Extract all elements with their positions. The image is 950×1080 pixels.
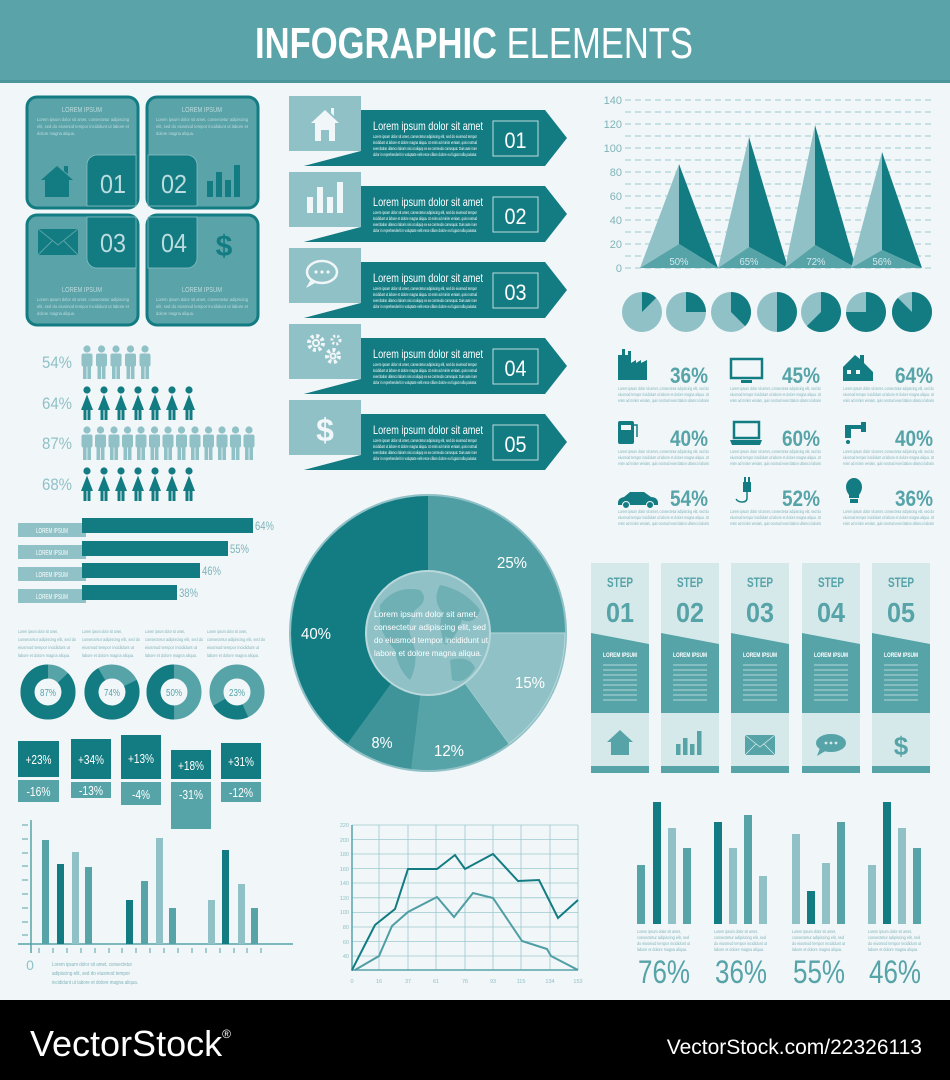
- row 54%: [42, 345, 150, 379]
- stat laptop 60%: [730, 422, 820, 451]
- ribbon 04: incididunt ut labore et dolore magna aliqua. Ut enim ad minim veniam, quis nostrud: [373, 368, 477, 373]
- tile 02: Lorem ipsum dolor sit amet, consectetur adipiscing: [156, 117, 249, 122]
- box +31/-12: +31%: [228, 754, 254, 769]
- panel: icon stats grid: enim ad minim veniam, quis nostrud exercitation ullamco laboris: [730, 398, 822, 403]
- tile 04: dolore magna aliqua.: [156, 311, 194, 316]
- step 04: 04: [817, 597, 845, 628]
- text blocks above donuts: consectetur adipiscing elit, sed do: [145, 637, 203, 642]
- step 05: STEP: [888, 574, 914, 590]
- ribbon 03: [289, 248, 567, 318]
- chart: central donut with globe: 15%: [515, 675, 545, 692]
- tile 04: 04: [161, 228, 187, 258]
- group 55%: Lorem ipsum dolor sit amet,: [792, 929, 836, 934]
- group 55%: consectetur adipiscing elit, sed: [792, 935, 844, 940]
- panel: horizontal bar chart: [18, 518, 274, 603]
- group 76%: [637, 802, 691, 990]
- donut 87%: [28, 672, 68, 712]
- ribbon 02: dolor in reprehenderit in voluptate velit esse cillum dolore eu fugiat nulla pariatur.: [373, 228, 477, 233]
- panel: small donuts: [28, 664, 265, 720]
- pyramid 50%: 50%: [670, 257, 689, 268]
- step 05: LOREM IPSUM: [884, 652, 918, 659]
- step 01: [591, 563, 649, 773]
- bar 46%: [18, 563, 221, 581]
- chart: line chart: 16: [376, 979, 382, 985]
- pyramid 65%: 65%: [740, 257, 759, 268]
- tile 03: dolore magna aliqua.: [37, 311, 75, 316]
- panel: people rows: [42, 345, 254, 501]
- step 04: STEP: [818, 574, 844, 590]
- panel: icon stats grid: Lorem ipsum dolor sit amet, consectetur adipiscing elit, sed do: [730, 386, 821, 391]
- chart: pyramid chart: [604, 95, 935, 275]
- donut 50%: 50%: [166, 688, 182, 699]
- panel: grouped bar charts with percentages: [637, 802, 922, 990]
- text blocks above donuts: labore et dolore magna aliqua.: [82, 653, 134, 658]
- donut 74%: 74%: [104, 688, 120, 699]
- stat car 54%: 54%: [670, 486, 708, 511]
- ribbon 04: [289, 324, 567, 394]
- donut 74%: [84, 664, 140, 720]
- ribbon 01: Lorem ipsum dolor sit amet: [373, 119, 483, 133]
- chart: central donut with globe: consectetur adipiscing elit, sed: [374, 622, 486, 632]
- panel: icon stats grid: enim ad minim veniam, quis nostrud exercitation ullamco laboris: [618, 461, 710, 466]
- stat car 54%: [618, 486, 708, 511]
- row 87%: 87%: [42, 434, 72, 453]
- chart: line chart: 76: [462, 979, 468, 985]
- panel: arrow ribbons: [289, 96, 567, 470]
- panel: icon stats grid: eiusmod tempor incididunt ut labore et dolore magna aliqua. Ut: [618, 392, 710, 397]
- group 46%: consectetur adipiscing elit, sed: [868, 935, 920, 940]
- step 03: 03: [746, 597, 774, 628]
- stat bulb 36%: 36%: [895, 486, 933, 511]
- tile 02: [147, 97, 258, 208]
- row 54%: 54%: [42, 353, 72, 372]
- bar 64%: LOREM IPSUM: [36, 528, 68, 535]
- stat monitor 45%: 45%: [782, 363, 820, 388]
- chart: line chart: 200: [340, 838, 349, 844]
- group 76%: Lorem ipsum dolor sit amet,: [637, 929, 681, 934]
- chart: central donut with globe: 8%: [372, 735, 392, 752]
- ribbon 02: Lorem ipsum dolor sit amet: [373, 195, 483, 209]
- bar chart: bottom left: [18, 820, 293, 986]
- chart: line chart: 93: [490, 979, 496, 985]
- tile 01: dolore magna aliqua.: [37, 131, 75, 136]
- segment 15%: [463, 633, 565, 744]
- chart: pyramid chart: 0: [616, 263, 622, 275]
- ribbon 03: Lorem ipsum dolor sit amet, consectetur adipiscing elit, sed do eiusmod tempor: [373, 286, 477, 291]
- group 46%: 46%: [869, 954, 921, 990]
- tile 03: elit, sed do eiusmod tempor incididunt ut labore et: [37, 304, 130, 309]
- step 05: $: [894, 731, 909, 761]
- ribbon 01: Lorem ipsum dolor sit amet, consectetur adipiscing elit, sed do eiusmod tempor: [373, 134, 477, 139]
- ribbon 04: 04: [504, 356, 526, 381]
- tile 04: Lorem ipsum dolor sit amet, consectetur adipiscing: [156, 297, 249, 302]
- chart: line chart: 134: [545, 979, 555, 985]
- tile 03: LOREM IPSUM: [62, 287, 102, 294]
- footer: [0, 1000, 950, 1080]
- panel: icon stats grid: [618, 349, 935, 526]
- step 02: LOREM IPSUM: [673, 652, 707, 659]
- ribbon 04: Lorem ipsum dolor sit amet: [373, 347, 483, 361]
- row 68%: 68%: [42, 475, 72, 494]
- chart: line chart: 61: [433, 979, 439, 985]
- panel: icon stats grid: eiusmod tempor incididunt ut labore et dolore magna aliqua. Ut: [730, 392, 822, 397]
- text blocks above donuts: consectetur adipiscing elit, sed do: [207, 637, 265, 642]
- group 76%: do eiusmod tempor incididunt ut: [637, 941, 691, 946]
- chart: line chart: 40: [343, 954, 349, 960]
- ribbon 05: $: [316, 412, 334, 448]
- tile 02: LOREM IPSUM: [182, 107, 222, 114]
- ribbon 02: exercitation ullamco laboris nisi ut aliquip ex ea commodo consequat. Duis aute irure: [373, 222, 477, 227]
- ribbon 05: exercitation ullamco laboris nisi ut aliquip ex ea commodo consequat. Duis aute irure: [373, 450, 477, 455]
- step 05: [872, 563, 930, 773]
- panel: icon stats grid: Lorem ipsum dolor sit amet, consectetur adipiscing elit, sed do: [618, 449, 709, 454]
- ribbon 03: exercitation ullamco laboris nisi ut aliquip ex ea commodo consequat. Duis aute irure: [373, 298, 477, 303]
- text blocks above donuts: eiusmod tempor incididunt ut: [207, 645, 260, 650]
- segment 40%: [291, 496, 428, 744]
- panel: icon stats grid: eiusmod tempor incididunt ut labore et dolore magna aliqua. Ut: [618, 455, 710, 460]
- bar 64%: 64%: [255, 519, 274, 533]
- chart: line chart: [340, 823, 583, 985]
- bar 55%: LOREM IPSUM: [36, 550, 68, 557]
- stat fuel 40%: [618, 421, 708, 451]
- bar 46%: LOREM IPSUM: [36, 572, 68, 579]
- tile 01: Lorem ipsum dolor sit amet, consectetur adipiscing: [37, 117, 130, 122]
- ribbon 02: [289, 172, 567, 242]
- panel: icon stats grid: Lorem ipsum dolor sit amet, consectetur adipiscing elit, sed do: [730, 449, 821, 454]
- group 36%: Lorem ipsum dolor sit amet,: [714, 929, 758, 934]
- step 01: 01: [606, 597, 634, 628]
- ribbon 02: 02: [504, 204, 526, 229]
- tile 02: elit, sed do eiusmod tempor incididunt ut labore et: [156, 124, 249, 129]
- bar 64%: [18, 518, 274, 537]
- text blocks above donuts: Lorem ipsum dolor sit amet,: [82, 629, 122, 634]
- stat factory 36%: 36%: [670, 363, 708, 388]
- step 02: [661, 563, 719, 773]
- tile 01: LOREM IPSUM: [62, 107, 102, 114]
- text blocks above donuts: Lorem ipsum dolor sit amet,: [145, 629, 185, 634]
- bar 38%: LOREM IPSUM: [36, 594, 68, 601]
- ribbon 05: 05: [504, 432, 526, 457]
- step 03: [731, 563, 789, 773]
- panel: icon stats grid: enim ad minim veniam, quis nostrud exercitation ullamco laboris: [618, 521, 710, 526]
- box +23/-16: +23%: [26, 752, 52, 767]
- text blocks above donuts: labore et dolore magna aliqua.: [145, 653, 197, 658]
- panel: icon stats grid: enim ad minim veniam, quis nostrud exercitation ullamco laboris: [730, 461, 822, 466]
- chart: line chart: 0: [350, 979, 354, 985]
- panel: numbered tiles: [27, 97, 258, 325]
- tile 01: 01: [100, 169, 126, 199]
- chart: pyramid chart: 40: [610, 215, 622, 227]
- stat plug 52%: 52%: [782, 486, 820, 511]
- group 76%: 76%: [638, 954, 690, 990]
- step 03: LOREM IPSUM: [743, 652, 777, 659]
- panel: icon stats grid: eiusmod tempor incididunt ut labore et dolore magna aliqua. Ut: [730, 515, 822, 520]
- group 55%: labore et dolore magna aliqua.: [792, 947, 842, 952]
- step 05: 05: [887, 597, 915, 628]
- ribbon 05: Lorem ipsum dolor sit amet: [373, 423, 483, 437]
- chart: line chart: 80: [343, 925, 349, 931]
- group 76%: labore et dolore magna aliqua.: [637, 947, 687, 952]
- panel: steps: [591, 563, 930, 773]
- chart: central donut with globe: [289, 494, 567, 772]
- ribbon 01: [289, 96, 567, 166]
- header bar: [0, 0, 950, 83]
- bar chart: bottom left: 0: [26, 957, 34, 973]
- step 04: LOREM IPSUM: [814, 652, 848, 659]
- ribbon 03: Lorem ipsum dolor sit amet: [373, 271, 483, 285]
- stat monitor 45%: [731, 359, 820, 388]
- ribbon 01: dolor in reprehenderit in voluptate velit esse cillum dolore eu fugiat nulla pariatur.: [373, 152, 477, 157]
- bar 55%: [18, 541, 249, 559]
- pie row: [622, 292, 932, 332]
- text blocks above donuts: consectetur adipiscing elit, sed do: [82, 637, 140, 642]
- tile 04: $: [216, 230, 233, 263]
- pyramid 72%: [785, 125, 856, 268]
- text blocks above donuts: labore et dolore magna aliqua.: [18, 653, 70, 658]
- pyramid 56%: [851, 152, 922, 268]
- tile 02: dolore magna aliqua.: [156, 131, 194, 136]
- bar 38%: [18, 585, 198, 603]
- stat tap 40%: [845, 422, 933, 451]
- footer: VectorStock: [30, 1023, 222, 1064]
- chart: line chart: 160: [340, 867, 349, 873]
- box +34/-13: [71, 739, 111, 798]
- tile 02: 02: [161, 169, 187, 199]
- stat house 64%: [843, 355, 933, 388]
- step 02: 02: [676, 597, 704, 628]
- panel: icon stats grid: eiusmod tempor incididunt ut labore et dolore magna aliqua. Ut: [618, 515, 710, 520]
- group 76%: consectetur adipiscing elit, sed: [637, 935, 689, 940]
- box +23/-16: [18, 741, 59, 802]
- ribbon 01: 01: [504, 128, 526, 153]
- chart: pyramid chart: 20: [610, 239, 622, 251]
- tile 03: 03: [100, 228, 126, 258]
- group 36%: do eiusmod tempor incididunt ut: [714, 941, 768, 946]
- text blocks above donuts: eiusmod tempor incididunt ut: [82, 645, 135, 650]
- box +18/-31: +18%: [178, 758, 204, 773]
- row 64%: 64%: [42, 394, 72, 413]
- group 36%: [714, 815, 768, 990]
- step 01: STEP: [607, 574, 633, 590]
- chart: central donut with globe: 40%: [301, 626, 331, 643]
- text blocks above donuts: Lorem ipsum dolor sit amet,: [18, 629, 58, 634]
- box +23/-16: -16%: [26, 784, 51, 799]
- text blocks above donuts: labore et dolore magna aliqua.: [207, 653, 259, 658]
- pyramid 50%: [640, 164, 718, 268]
- chart: line chart: 140: [340, 881, 349, 887]
- segment 8%: [348, 682, 421, 769]
- tile 04: elit, sed do eiusmod tempor incididunt ut labore et: [156, 304, 249, 309]
- donut 23%: [209, 664, 265, 720]
- tile 01: elit, sed do eiusmod tempor incididunt ut labore et: [37, 124, 130, 129]
- chart: line chart: 100: [340, 910, 349, 916]
- bar chart: bottom left: incididunt ut labore et dolore magna aliqua.: [52, 980, 138, 986]
- chart: line chart: 37: [405, 979, 411, 985]
- segment 25%: [428, 496, 565, 633]
- step 02: STEP: [677, 574, 703, 590]
- text blocks above donuts: [18, 629, 265, 658]
- globe: [366, 571, 490, 695]
- group 36%: consectetur adipiscing elit, sed: [714, 935, 766, 940]
- stat house 64%: 64%: [895, 363, 933, 388]
- box +18/-31: -31%: [179, 787, 203, 802]
- chart: central donut with globe: 25%: [497, 555, 527, 572]
- panel: icon stats grid: enim ad minim veniam, quis nostrud exercitation ullamco laboris: [730, 521, 822, 526]
- ribbon 05: incididunt ut labore et dolore magna aliqua. Ut enim ad minim veniam, quis nostrud: [373, 444, 477, 449]
- box +18/-31: [171, 750, 211, 829]
- box +13/-4: -4%: [132, 787, 150, 802]
- ribbon 03: dolor in reprehenderit in voluptate velit esse cillum dolore eu fugiat nulla pariatur.: [373, 304, 477, 309]
- chart: line chart: 120: [340, 896, 349, 902]
- bar chart: bottom left: adipiscing elit, sed do eiusmod tempor: [52, 971, 130, 977]
- ribbon 04: exercitation ullamco laboris nisi ut aliquip ex ea commodo consequat. Duis aute irure: [373, 374, 477, 379]
- ribbon 05: dolor in reprehenderit in voluptate velit esse cillum dolore eu fugiat nulla pariatur.: [373, 456, 477, 461]
- footer: VectorStock.com/22326113: [667, 1036, 922, 1059]
- donut 23%: 23%: [229, 688, 245, 699]
- pyramid 72%: 72%: [806, 257, 826, 268]
- panel: icon stats grid: Lorem ipsum dolor sit amet, consectetur adipiscing elit, sed do: [730, 509, 821, 514]
- ribbon 02: Lorem ipsum dolor sit amet, consectetur adipiscing elit, sed do eiusmod tempor: [373, 210, 477, 215]
- title: INFOGRAPHIC ELEMENTS: [255, 19, 693, 68]
- box +13/-4: [121, 735, 161, 805]
- chart: central donut with globe: Lorem ipsum dolor sit amet,: [374, 609, 478, 619]
- chart: line chart: 220: [340, 823, 349, 829]
- group 46%: [868, 802, 922, 990]
- box +34/-13: -13%: [79, 783, 103, 798]
- row 87%: [42, 426, 254, 460]
- stat bulb 36%: [846, 478, 933, 511]
- text blocks above donuts: consectetur adipiscing elit, sed do: [18, 637, 76, 642]
- group 46%: Lorem ipsum dolor sit amet,: [868, 929, 912, 934]
- ribbon 03: incididunt ut labore et dolore magna aliqua. Ut enim ad minim veniam, quis nostrud: [373, 292, 477, 297]
- step 01: LOREM IPSUM: [603, 652, 637, 659]
- group 46%: do eiusmod tempor incididunt ut: [868, 941, 922, 946]
- chart: pyramid chart: 80: [610, 167, 622, 179]
- row 68%: [42, 467, 195, 501]
- chart: central donut with globe: labore et dolore magna aliqua.: [374, 648, 482, 658]
- text blocks above donuts: eiusmod tempor incididunt ut: [18, 645, 71, 650]
- bar 55%: 55%: [230, 542, 249, 556]
- ribbon 03: 03: [504, 280, 526, 305]
- panel: plus/minus boxes: [18, 735, 261, 829]
- chart: line chart: 60: [343, 940, 349, 946]
- ribbon 01: incididunt ut labore et dolore magna aliqua. Ut enim ad minim veniam, quis nostrud: [373, 140, 477, 145]
- chart: pyramid chart: 120: [604, 119, 622, 131]
- box +31/-12: [221, 743, 261, 802]
- stat laptop 60%: 60%: [782, 426, 820, 451]
- bar 38%: 38%: [179, 586, 198, 600]
- chart: central donut with globe: do eiusmod tempor incididunt ut: [374, 635, 489, 645]
- ribbon 02: incididunt ut labore et dolore magna aliqua. Ut enim ad minim veniam, quis nostrud: [373, 216, 477, 221]
- chart: pyramid chart: 60: [610, 191, 622, 203]
- pyramid 56%: 56%: [872, 257, 892, 268]
- chart: pyramid chart: 140: [604, 95, 622, 107]
- tile 03: Lorem ipsum dolor sit amet, consectetur adipiscing: [37, 297, 130, 302]
- text blocks above donuts: Lorem ipsum dolor sit amet,: [207, 629, 247, 634]
- ribbon 05: Lorem ipsum dolor sit amet, consectetur adipiscing elit, sed do eiusmod tempor: [373, 438, 477, 443]
- tile 04: [147, 215, 258, 325]
- panel: icon stats grid: Lorem ipsum dolor sit amet, consectetur adipiscing elit, sed do: [618, 386, 709, 391]
- panel: icon stats grid: enim ad minim veniam, quis nostrud exercitation ullamco laboris: [618, 398, 710, 403]
- group 55%: 55%: [793, 954, 845, 990]
- box +34/-13: +34%: [78, 752, 104, 767]
- pyramid 65%: [718, 137, 788, 268]
- step 04: [802, 563, 860, 773]
- group 46%: labore et dolore magna aliqua.: [868, 947, 918, 952]
- donut 50%: [154, 672, 194, 712]
- stat factory 36%: [618, 349, 708, 388]
- ribbon 01: exercitation ullamco laboris nisi ut aliquip ex ea commodo consequat. Duis aute irure: [373, 146, 477, 151]
- stat fuel 40%: 40%: [670, 426, 708, 451]
- tile 01: [27, 97, 138, 208]
- group 55%: [792, 822, 846, 990]
- chart: line chart: 153: [573, 979, 583, 985]
- group 36%: labore et dolore magna aliqua.: [714, 947, 764, 952]
- tile 03: [27, 215, 138, 325]
- segment 12%: [411, 682, 508, 770]
- footer: ®: [222, 1027, 231, 1041]
- bar chart: bottom left: Lorem ipsum dolor sit amet, consectetur: [52, 962, 132, 968]
- stat plug 52%: [736, 477, 820, 511]
- group 55%: do eiusmod tempor incididunt ut: [792, 941, 846, 946]
- ribbon 04: Lorem ipsum dolor sit amet, consectetur adipiscing elit, sed do eiusmod tempor: [373, 362, 477, 367]
- stat tap 40%: 40%: [895, 426, 933, 451]
- text blocks above donuts: eiusmod tempor incididunt ut: [145, 645, 198, 650]
- ribbon 04: dolor in reprehenderit in voluptate velit esse cillum dolore eu fugiat nulla pariatur.: [373, 380, 477, 385]
- box +31/-12: -12%: [229, 785, 253, 800]
- step 03: STEP: [747, 574, 773, 590]
- chart: line chart: 115: [517, 979, 525, 985]
- tile 04: LOREM IPSUM: [182, 287, 222, 294]
- row 64%: [42, 386, 195, 420]
- group 36%: 36%: [715, 954, 767, 990]
- ribbon 05: [289, 400, 567, 470]
- donut 87%: 87%: [40, 688, 56, 699]
- bar 46%: 46%: [202, 564, 221, 578]
- panel: icon stats grid: eiusmod tempor incididunt ut labore et dolore magna aliqua. Ut: [730, 455, 822, 460]
- panel: icon stats grid: Lorem ipsum dolor sit amet, consectetur adipiscing elit, sed do: [618, 509, 709, 514]
- chart: central donut with globe: 12%: [434, 743, 464, 760]
- chart: pyramid chart: 100: [604, 143, 622, 155]
- chart: line chart: 180: [340, 852, 349, 858]
- box +13/-4: +13%: [128, 751, 154, 766]
